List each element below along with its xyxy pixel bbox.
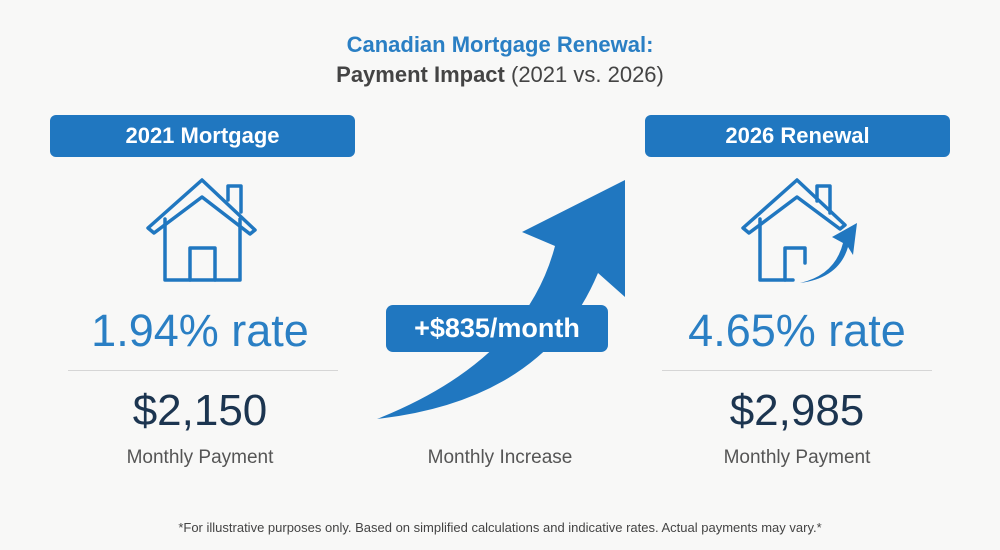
label: Monthly Increase: Monthly Increase xyxy=(428,447,572,468)
callout: +$835/month xyxy=(386,305,608,352)
icon: house left xyxy=(146,178,257,282)
title: Canadian Mortgage Renewal: xyxy=(347,32,653,57)
pill: 2026 Renewal: 2026 Renewal xyxy=(725,123,870,148)
rate 2026: 4.65% rate xyxy=(688,305,906,356)
icon: house with arrow right xyxy=(741,178,857,283)
payment 2026: $2,985 xyxy=(730,386,864,435)
label 2021: Monthly Payment xyxy=(127,447,273,468)
label 2026: Monthly Payment xyxy=(724,447,870,468)
pill: 2026 Renewal xyxy=(645,115,950,157)
title xyxy=(336,32,664,87)
title: Payment Impact (2021 vs. 2026) xyxy=(336,62,664,87)
pill: 2021 Mortgage xyxy=(50,115,355,157)
callout: +$835/month: +$835/month xyxy=(414,313,580,343)
payment 2021: $2,150 xyxy=(133,386,267,435)
rate 2021: 1.94% rate xyxy=(91,305,309,356)
pill: 2021 Mortgage: 2021 Mortgage xyxy=(125,123,280,148)
footer note: *For illustrative purposes only. Based on simplified calculations and indicative rates. Actual payments may vary.* xyxy=(178,520,822,535)
